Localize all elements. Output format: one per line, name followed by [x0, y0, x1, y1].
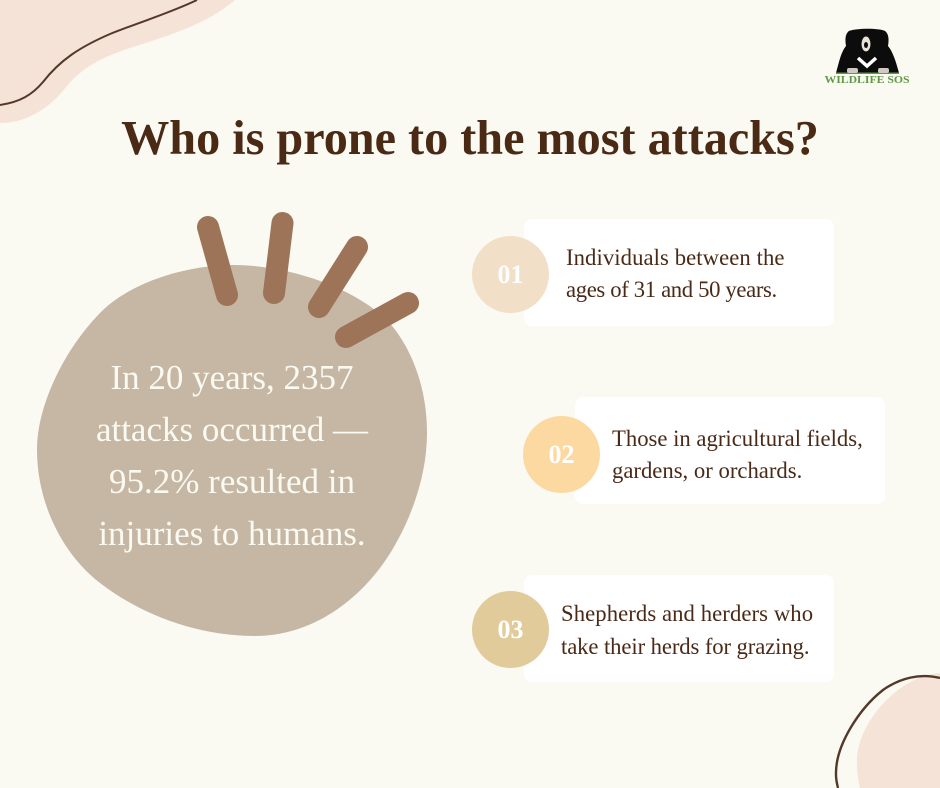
- stat text in blob: In 20 years, 2357: [110, 358, 354, 397]
- badge 02: 02: [548, 440, 574, 469]
- top-left corner blob: [0, 0, 235, 123]
- title: Who is prone to the most attacks?: [121, 112, 819, 165]
- card 3 text: Shepherds and herders who: [561, 601, 813, 626]
- card 1 text: ages of 31 and 50 years.: [566, 277, 777, 302]
- card 1 text: Individuals between the: [566, 245, 785, 270]
- stat text in blob: injuries to humans.: [98, 514, 366, 553]
- badge 01: 01: [498, 260, 524, 289]
- badge 02: [523, 416, 600, 493]
- badge 03: 03: [498, 615, 524, 644]
- badge 01: [472, 236, 549, 313]
- logo wordmark: WILDLIFE SOS: [824, 74, 910, 86]
- card 2: [575, 397, 885, 504]
- stat blob: [37, 265, 427, 636]
- stat text in blob: [96, 358, 368, 553]
- sun-ray sticks: [208, 223, 408, 337]
- icon: sloth bear: [836, 29, 899, 74]
- card 3: [524, 575, 834, 682]
- card 3 text: [561, 601, 813, 659]
- bottom-right corner blob: [836, 673, 940, 788]
- card 1 text: [566, 245, 785, 302]
- stat text in blob: attacks occurred —: [96, 410, 368, 449]
- card 2 text: Those in agricultural fields,: [612, 426, 863, 451]
- logo: Wildlife SOS: [824, 28, 910, 86]
- stat text in blob: 95.2% resulted in: [109, 462, 355, 501]
- card 1: [524, 219, 834, 326]
- card 3 text: take their herds for grazing.: [561, 634, 809, 659]
- card 2 text: gardens, or orchards.: [612, 458, 802, 483]
- badge 03: [472, 591, 549, 668]
- card 2 text: [612, 426, 863, 483]
